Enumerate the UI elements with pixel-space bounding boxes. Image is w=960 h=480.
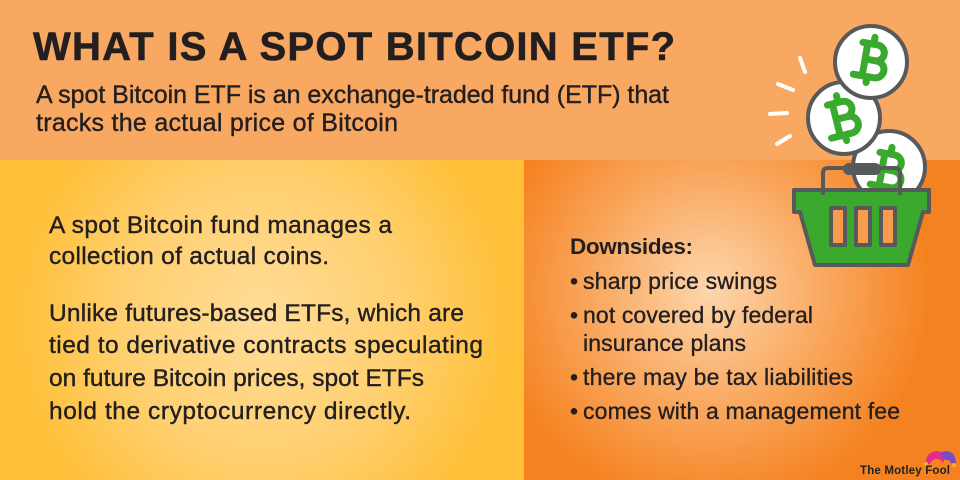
text block: downsides list: sharp price swings: [583, 268, 777, 294]
text block: downsides list: Downsides:: [570, 234, 693, 259]
icon: bottom coin: [851, 129, 927, 188]
text block: downsides list: insurance plans: [583, 330, 746, 356]
text block: downsides list: •: [570, 302, 578, 328]
text block: spot fund explanation: collection of actual coins.: [49, 243, 329, 270]
icon: motion lines: [770, 58, 805, 144]
icon: basket: [794, 163, 929, 265]
text block: spot fund explanation: [49, 212, 483, 425]
subtitle: A spot Bitcoin ETF is an exchange-traded fund (ETF) that: [36, 81, 669, 109]
header band: [0, 0, 960, 160]
text block: downsides list: not covered by federal: [583, 302, 813, 328]
text block: spot fund explanation: on future Bitcoin prices, spot ETFs: [49, 365, 424, 392]
text block: downsides list: •: [570, 268, 578, 294]
text block: spot fund explanation: tied to derivative contracts speculating: [49, 332, 483, 359]
icon: top coin: [835, 26, 907, 98]
subtitle: [36, 81, 669, 137]
text block: spot fund explanation: hold the cryptocurrency directly.: [49, 398, 411, 425]
text block: downsides list: [570, 234, 900, 424]
text block: downsides list: there may be tax liabilities: [583, 364, 853, 390]
logo: The Motley Fool: [860, 451, 956, 477]
panel: downsides background: [524, 160, 960, 480]
text block: spot fund explanation: Unlike futures-based ETFs, which are: [49, 300, 464, 327]
title: WHAT IS A SPOT BITCOIN ETF?: [33, 25, 675, 69]
text block: downsides list: •: [570, 398, 578, 424]
logo: The Motley Fool: The Motley Fool: [860, 465, 950, 477]
text block: downsides list: •: [570, 364, 578, 390]
text block: spot fund explanation: A spot Bitcoin fund manages a: [49, 212, 392, 239]
panel: left summary background: [0, 160, 524, 480]
text block: downsides list: comes with a management fee: [583, 398, 900, 424]
subtitle: tracks the actual price of Bitcoin: [36, 109, 398, 137]
icon: middle coin: [808, 82, 880, 154]
